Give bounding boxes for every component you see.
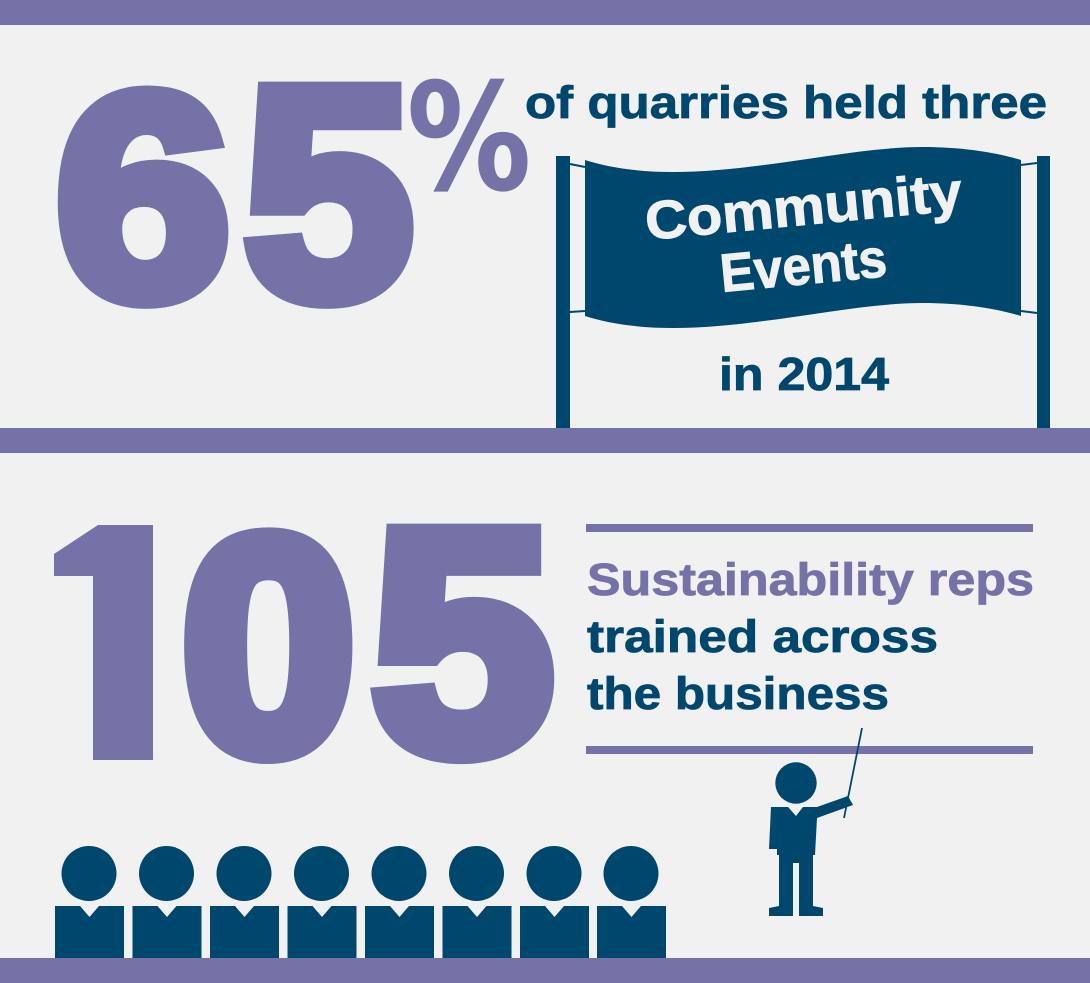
big stat: 105: 5 (372, 465, 553, 818)
big stat: 105 (54, 524, 554, 764)
banner text (642, 162, 965, 304)
rule above reps text (586, 524, 1033, 532)
middle bar (0, 428, 1090, 453)
big stat: 65%: 5 (244, 25, 413, 361)
big stat: 65% (56, 25, 531, 361)
banner: community events (556, 147, 1050, 428)
big stat: 105: 1 (27, 465, 203, 824)
icon: row of audience figures (55, 846, 666, 958)
big stat: 65%: 6 (56, 35, 230, 359)
text: sustainability reps: Sustainability reps (587, 554, 1034, 605)
top bar (0, 0, 1090, 25)
rule below reps text (586, 746, 1033, 754)
big stat: 105: 0 (182, 474, 355, 816)
text: sustainability reps (587, 554, 1034, 719)
banner text: Events (717, 228, 889, 304)
big stat: 65%: % (407, 52, 531, 224)
text: in 2014: in 2014 (719, 348, 889, 400)
text: sustainability reps: the business (587, 668, 889, 719)
heading: of quarries held three: of quarries held three (525, 77, 1047, 128)
bottom bar (0, 958, 1090, 983)
icon: presenter with pointer (769, 728, 862, 916)
text: sustainability reps: trained across (587, 611, 938, 662)
banner text: Community (642, 162, 965, 252)
